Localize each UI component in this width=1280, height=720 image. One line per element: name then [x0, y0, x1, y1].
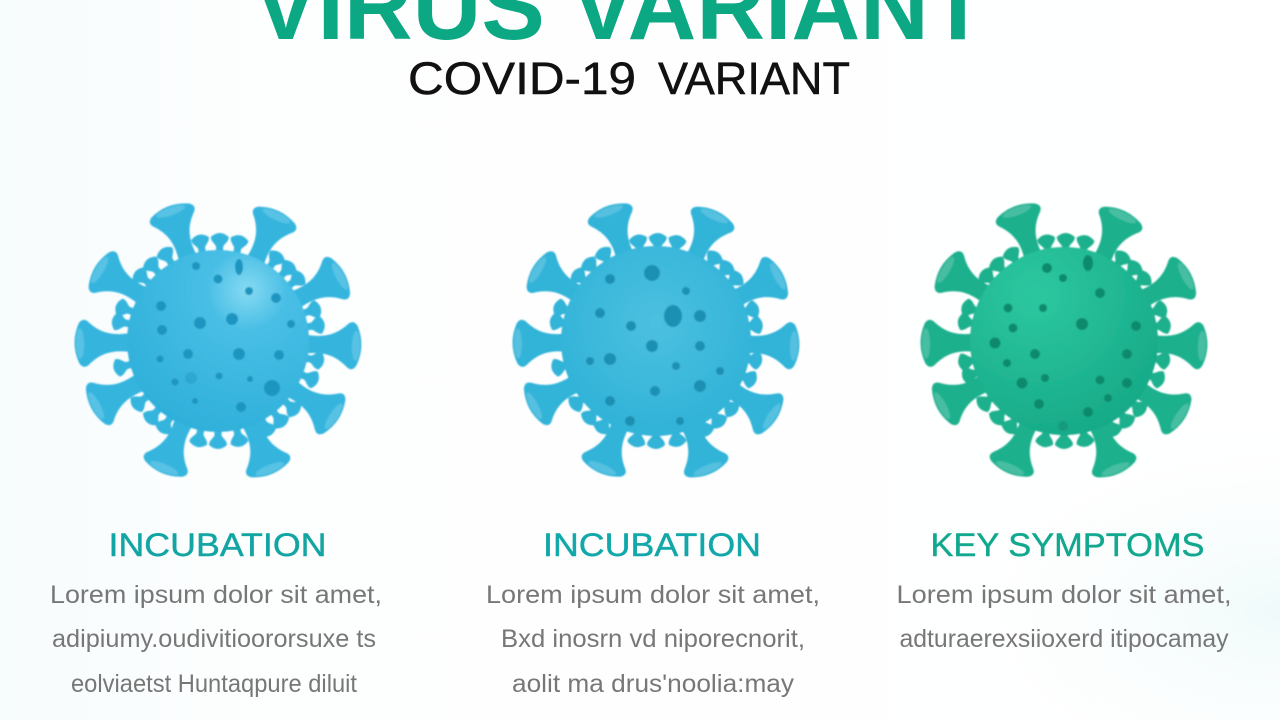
icon: teal-blue virus	[512, 198, 800, 483]
panel: incubation left	[50, 198, 382, 698]
heading: incubation: INCUBATION	[108, 527, 326, 563]
text block: description	[486, 581, 820, 698]
text block: description: Bxd inosrn vd niporecnorit,	[501, 625, 805, 653]
text block: description	[896, 581, 1232, 653]
icon: blue virus	[74, 198, 362, 483]
text block: description: adipiumy.oudivitioororsuxe ts	[52, 625, 376, 653]
subtitle: VARIANT	[658, 53, 850, 104]
text block: description: aolit ma drus'noolia:may	[512, 670, 795, 698]
icon: green virus	[920, 198, 1208, 483]
text block: description: eolviaetst Huntaqpure diluit	[71, 670, 357, 698]
text block: description: Lorem ipsum dolor sit amet,	[896, 581, 1232, 609]
subtitle: COVID-19	[408, 53, 636, 104]
text block: description: adturaerexsiioxerd itipocamay	[900, 625, 1229, 653]
text block: description: Lorem ipsum dolor sit amet,	[50, 581, 382, 609]
heading: incubation: INCUBATION	[543, 527, 761, 563]
subtitle	[408, 53, 850, 104]
panel: key symptoms	[896, 198, 1232, 653]
text block: description: Lorem ipsum dolor sit amet,	[486, 581, 820, 609]
panel: incubation center	[486, 198, 820, 698]
heading: key symptoms: KEY SYMPTOMS	[930, 527, 1204, 563]
text block: description	[50, 581, 382, 698]
